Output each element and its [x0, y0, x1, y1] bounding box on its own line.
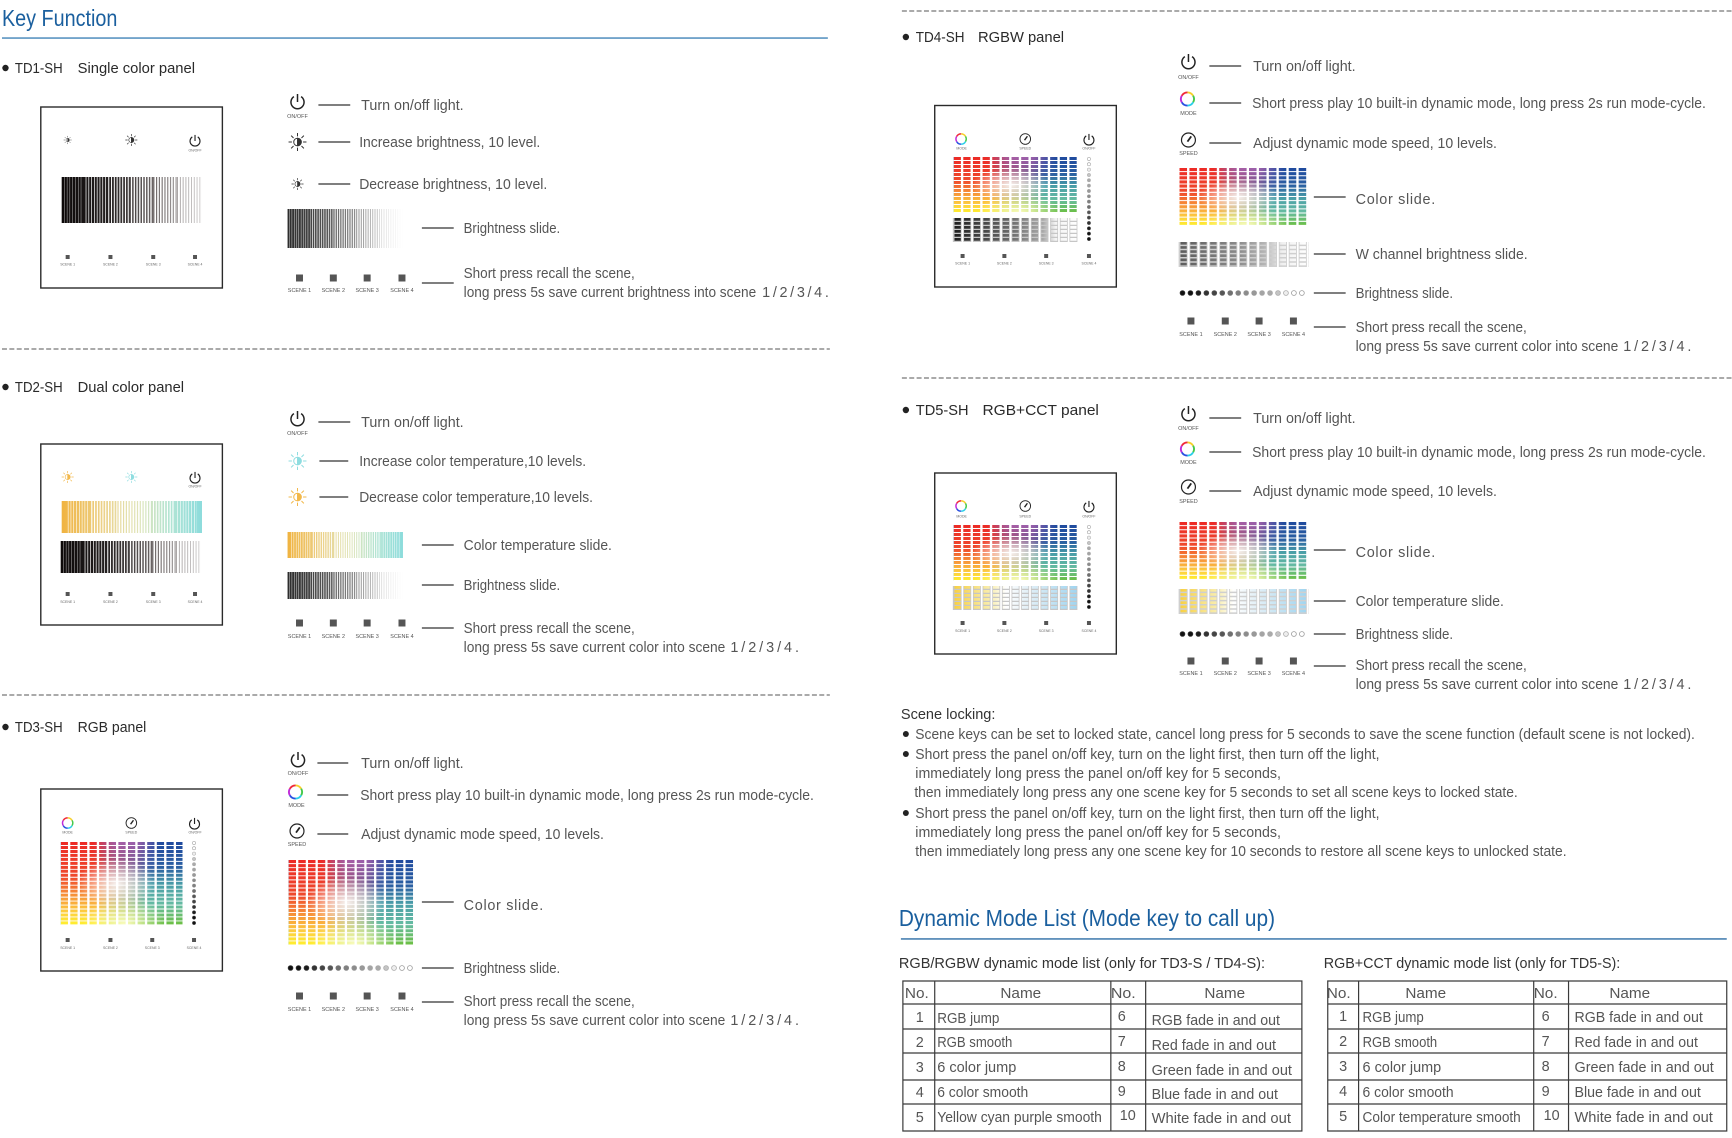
key: decrease color temperature: Decrease color temperature,10 levels. — [359, 490, 593, 506]
table cells: Red fade in and out — [1152, 1038, 1276, 1054]
panel illustration TD3: SCENE 2 — [103, 946, 118, 950]
section title TD4-SH: RGBW panel — [978, 29, 1064, 46]
panel illustration TD4: SPEED — [1019, 146, 1032, 151]
key: scene buttons: SCENE 1 — [1179, 332, 1203, 338]
table cells — [905, 986, 1292, 1127]
table cells: 6 color jump — [937, 1060, 1016, 1076]
key: on/off: ON/OFF — [287, 431, 308, 437]
table grid — [1328, 981, 1727, 1131]
section: TD4-SH RGBW panel — [903, 29, 1706, 355]
key: brightness slide: Brightness slide. — [1356, 286, 1453, 302]
table cells: Yellow cyan purple smooth — [937, 1110, 1102, 1126]
table cells: 10 — [1120, 1108, 1136, 1124]
table cells: 6 color jump — [1363, 1060, 1441, 1076]
key: decrease brightness: Decrease brightness, 10 level. — [359, 177, 547, 193]
key: color temperature slide — [288, 532, 612, 558]
key: speed — [288, 824, 604, 848]
table cells: No. — [1111, 986, 1136, 1002]
panel illustration TD3: SCENE 1 — [60, 946, 75, 950]
panel illustration TD5: SCENE 4 — [1082, 629, 1096, 633]
panel illustration TD4: SCENE 4 — [1082, 261, 1096, 266]
panel illustration TD1: SCENE 2 — [103, 262, 118, 267]
key: scene buttons: long press 5s save current color into scene — [1356, 677, 1618, 693]
table cells: 6 color smooth — [1363, 1085, 1454, 1101]
section: TD2-SH dual color panel — [2, 379, 799, 656]
table cells: Name — [1204, 986, 1245, 1002]
key: on/off: ON/OFF — [288, 771, 309, 777]
key: scene buttons: Short press recall the scene, — [1356, 320, 1527, 336]
key: scene buttons: SCENE 1 — [288, 634, 311, 640]
key: scene buttons: long press 5s save current color into scene — [464, 1013, 725, 1029]
key: brightness slide — [1180, 286, 1453, 302]
panel illustration TD4: SCENE 1 — [955, 261, 970, 266]
panel illustration TD3: SPEED — [125, 830, 138, 835]
key: scene buttons: SCENE 2 — [1214, 332, 1237, 338]
key: mode: Short press play 10 built-in dynamic mode, long press 2s run mode-cycle. — [1252, 445, 1706, 461]
table: RGB/RGBW dynamic mode list — [899, 956, 1302, 1131]
section title TD3-SH: TD3-SH — [15, 719, 63, 736]
section: TD1-SH single color panel — [2, 60, 829, 301]
table cells: Green fade in and out — [1152, 1063, 1292, 1079]
panel illustration TD5: SCENE 3 — [1039, 629, 1054, 633]
panel illustration TD1 — [41, 107, 222, 288]
left column — [2, 5, 830, 1029]
table cells: RGB fade in and out — [1152, 1013, 1280, 1029]
panel illustration TD4 — [935, 106, 1116, 287]
key: speed: Adjust dynamic mode speed, 10 levels. — [1253, 136, 1497, 152]
table cells: 9 — [1118, 1084, 1126, 1100]
table cells: RGB jump — [1363, 1010, 1424, 1026]
section title TD2-SH: TD2-SH — [15, 379, 63, 396]
panel illustration TD5: ON/OFF — [1082, 514, 1096, 519]
section title TD4-SH: TD4-SH — [916, 29, 965, 46]
panel illustration TD1: SCENE 4 — [188, 262, 203, 267]
table cells: 3 — [1339, 1059, 1347, 1075]
panel illustration TD4: SCENE 2 — [997, 261, 1012, 266]
table cells: 6 — [1542, 1009, 1550, 1025]
text block: scene locking: Short press the panel on/off key, turn on the light first, then turn off the light, — [915, 806, 1379, 822]
key: scene buttons: SCENE 3 — [355, 1007, 379, 1013]
table cells: 9 — [1542, 1084, 1550, 1100]
key: scene buttons: long press 5s save current color into scene — [1356, 339, 1618, 355]
key: on/off — [287, 411, 464, 437]
key: color slide — [1179, 168, 1435, 246]
key: speed: SPEED — [288, 842, 306, 848]
panel illustration TD5: SCENE 2 — [997, 629, 1012, 633]
key: scene buttons: SCENE 4 — [390, 1007, 414, 1013]
table cells: 2 — [1339, 1034, 1347, 1050]
key: decrease color temperature — [289, 488, 593, 506]
key: scene buttons: Short press recall the scene, — [1356, 658, 1527, 674]
table cells: Name — [1609, 986, 1650, 1002]
table cells: 8 — [1542, 1059, 1550, 1075]
heading: Key Function: Key Function — [2, 5, 117, 31]
panel illustration TD1: SCENE 1 — [60, 262, 75, 267]
key: color temperature slide — [1179, 589, 1504, 614]
table cells — [1327, 986, 1714, 1126]
key: brightness slide: Brightness slide. — [1356, 627, 1453, 643]
key: scene buttons: long press 5s save current color into scene — [464, 640, 725, 656]
key: color slide — [289, 860, 543, 974]
key: color slide — [1179, 522, 1435, 600]
key: brightness slide — [288, 572, 560, 599]
key: on/off — [1178, 406, 1356, 432]
key: on/off: Turn on/off light. — [361, 415, 464, 431]
key: increase color temperature: Increase color temperature,10 levels. — [359, 454, 586, 470]
panel illustration TD1: SCENE 3 — [146, 262, 161, 267]
key: increase brightness — [289, 133, 540, 151]
panel illustration TD5: SCENE 1 — [955, 629, 970, 633]
key: scene buttons — [288, 266, 829, 301]
table cells: Red fade in and out — [1575, 1035, 1698, 1051]
key: mode: Short press play 10 built-in dynamic mode, long press 2s run mode-cycle. — [1252, 96, 1706, 112]
key: color slide: Color slide. — [1356, 192, 1435, 208]
section: TD3-SH RGB panel — [2, 719, 814, 1029]
key: scene buttons — [1179, 658, 1691, 693]
table caption: RGB+CCT dynamic mode list (only for TD5-S): — [1324, 956, 1620, 972]
key: brightness slide — [288, 209, 560, 248]
key: scene buttons: SCENE 1 — [288, 1007, 311, 1013]
table cells: 7 — [1542, 1034, 1550, 1050]
key: brightness slide — [288, 961, 560, 977]
text block: scene locking: immediately long press the panel on/off key for 5 seconds, — [915, 825, 1281, 841]
section: TD5-SH RGB+CCT panel — [903, 402, 1706, 693]
section title TD5-SH: TD5-SH — [916, 402, 969, 419]
key: mode: MODE — [288, 803, 305, 809]
key: on/off — [287, 94, 464, 120]
key: scene buttons: SCENE 2 — [322, 288, 345, 294]
key: scene buttons — [288, 992, 799, 1029]
text block: scene locking: Scene locking: — [901, 707, 995, 723]
key: mode — [1180, 92, 1706, 117]
key: color slide: Color slide. — [464, 898, 543, 914]
text block: scene locking: Short press the panel on/off key, turn on the light first, then turn off the light, — [915, 747, 1379, 763]
panel illustration TD5 — [935, 473, 1116, 654]
section title TD1-SH: Single color panel — [78, 60, 195, 77]
section title TD2-SH — [2, 379, 184, 396]
key: color temperature slide: Color temperature slide. — [464, 538, 612, 554]
key: brightness slide: Brightness slide. — [464, 961, 560, 977]
section title TD3-SH: RGB panel — [78, 719, 146, 736]
section title TD3-SH — [2, 719, 146, 736]
panel illustration TD2: SCENE 1 — [60, 600, 75, 604]
key: speed: Adjust dynamic mode speed, 10 levels. — [1253, 484, 1497, 500]
table cells: 5 — [916, 1110, 924, 1126]
section title TD1-SH: TD1-SH — [15, 60, 63, 77]
panel illustration TD2: SCENE 4 — [188, 600, 203, 604]
key: scene buttons: SCENE 4 — [390, 634, 414, 640]
key: mode — [1180, 442, 1706, 466]
key: scene buttons: 1/2/3/4. — [730, 1013, 799, 1029]
table cells: RGB smooth — [1363, 1035, 1437, 1051]
key: on/off: Turn on/off light. — [1253, 59, 1356, 75]
key: speed: SPEED — [1179, 151, 1198, 157]
panel illustration TD3: ON/OFF — [188, 830, 202, 835]
table cells: Green fade in and out — [1575, 1060, 1714, 1076]
key: on/off: Turn on/off light. — [361, 756, 464, 772]
table caption: RGB/RGBW dynamic mode list (only for TD3-S / TD4-S): — [899, 956, 1265, 972]
table cells: No. — [1327, 986, 1351, 1002]
text block: scene locking: then immediately long press any one scene key for 10 seconds to restore all scene keys to unlocked state. — [915, 844, 1567, 860]
panel illustration TD3 — [41, 789, 222, 971]
panel illustration TD5: MODE — [956, 514, 967, 519]
panel illustration TD2: SCENE 2 — [103, 600, 118, 604]
table cells: Name — [1405, 986, 1446, 1002]
key: scene buttons: SCENE 2 — [322, 634, 345, 640]
panel illustration TD4: ON/OFF — [1082, 146, 1096, 151]
key: scene buttons — [1179, 318, 1691, 355]
table cells: Blue fade in and out — [1152, 1087, 1278, 1103]
key: speed — [1179, 480, 1497, 505]
table cells: RGB smooth — [937, 1035, 1012, 1051]
table cells: RGB jump — [937, 1011, 999, 1027]
key: color temperature slide: Color temperature slide. — [1356, 594, 1504, 610]
key: scene buttons: Short press recall the scene, — [464, 994, 635, 1010]
key: scene buttons: SCENE 2 — [322, 1007, 345, 1013]
panel illustration TD4: MODE — [956, 146, 967, 151]
table cells: Name — [1000, 986, 1041, 1002]
table cells: White fade in and out — [1152, 1111, 1291, 1127]
table cells: 4 — [1339, 1084, 1347, 1100]
table: RGB+CCT dynamic mode list — [1324, 956, 1727, 1131]
table cells: 6 — [1118, 1009, 1126, 1025]
panel illustration TD2: SCENE 3 — [146, 600, 161, 604]
table cells: RGB fade in and out — [1575, 1010, 1703, 1026]
table cells: No. — [905, 986, 929, 1002]
key: scene buttons: SCENE 3 — [355, 634, 379, 640]
right column — [899, 11, 1732, 1131]
key: scene buttons: 1/2/3/4. — [1623, 339, 1691, 355]
key: scene buttons: Short press recall the scene, — [464, 621, 635, 637]
table cells: 1 — [916, 1010, 924, 1026]
table cells: 1 — [1339, 1009, 1347, 1025]
key: speed: Adjust dynamic mode speed, 10 levels. — [361, 827, 604, 843]
heading: Dynamic Mode List: Dynamic Mode List (Mode key to call up) — [899, 905, 1275, 931]
key: mode: MODE — [1180, 460, 1197, 466]
key: W channel brightness slide — [1179, 242, 1528, 267]
table cells: 7 — [1118, 1034, 1126, 1050]
table grid — [903, 981, 1302, 1131]
key: mode: MODE — [1180, 111, 1197, 117]
text block: scene locking: then immediately long press any one scene key for 5 seconds to set all scene keys to locked state. — [914, 785, 1518, 801]
key: color slide: Color slide. — [1356, 545, 1435, 561]
table cells: No. — [1534, 986, 1558, 1002]
panel illustration TD2 — [41, 444, 222, 625]
key: on/off: Turn on/off light. — [1253, 411, 1356, 427]
key: scene buttons: 1/2/3/4. — [762, 285, 829, 301]
key: on/off: Turn on/off light. — [361, 98, 464, 114]
key: scene buttons — [288, 620, 799, 656]
key: scene buttons: SCENE 2 — [1214, 671, 1237, 677]
panel illustration TD2: ON/OFF — [188, 484, 202, 489]
section title TD4-SH — [903, 29, 1064, 46]
key: W channel brightness slide: W channel brightness slide. — [1356, 247, 1528, 263]
key: scene buttons: 1/2/3/4. — [1623, 677, 1691, 693]
panel illustration TD5: SPEED — [1019, 514, 1032, 519]
key: brightness slide: Brightness slide. — [464, 221, 560, 237]
key: mode — [288, 785, 814, 809]
section title TD5-SH: RGB+CCT panel — [982, 402, 1099, 419]
key: scene buttons: 1/2/3/4. — [730, 640, 799, 656]
key: increase brightness: Increase brightness, 10 level. — [359, 135, 540, 151]
key: brightness slide: Brightness slide. — [464, 578, 560, 594]
section title TD2-SH: Dual color panel — [78, 379, 184, 396]
table cells: 4 — [916, 1085, 924, 1101]
table cells: 6 color smooth — [937, 1085, 1028, 1101]
table cells: 3 — [916, 1060, 924, 1076]
table cells: 10 — [1544, 1108, 1560, 1124]
key: on/off — [288, 752, 464, 777]
key: scene buttons: SCENE 3 — [1247, 332, 1271, 338]
key: mode: Short press play 10 built-in dynamic mode, long press 2s run mode-cycle. — [360, 788, 814, 804]
key: on/off: ON/OFF — [287, 114, 308, 120]
key: on/off — [1178, 54, 1356, 81]
key: scene buttons: SCENE 3 — [1247, 671, 1271, 677]
panel illustration TD3: MODE — [62, 830, 74, 835]
text block: scene locking: immediately long press the panel on/off key for 5 seconds, — [915, 766, 1281, 782]
table cells: 5 — [1339, 1109, 1347, 1125]
key: scene buttons: SCENE 4 — [1282, 332, 1305, 338]
section title TD1-SH — [2, 60, 195, 77]
panel illustration TD3: SCENE 4 — [187, 946, 202, 950]
key: brightness slide — [1180, 627, 1453, 643]
key: scene buttons: SCENE 1 — [1179, 671, 1203, 677]
key: scene buttons: long press 5s save current brightness into scene — [464, 285, 756, 301]
panel illustration TD4: SCENE 3 — [1039, 261, 1054, 266]
table cells: 8 — [1118, 1059, 1126, 1075]
key: speed: SPEED — [1179, 499, 1198, 505]
key: scene buttons: SCENE 1 — [288, 288, 311, 294]
key: scene buttons: Short press recall the scene, — [464, 266, 635, 282]
table cells: Blue fade in and out — [1575, 1085, 1701, 1101]
panel illustration TD1: ON/OFF — [188, 148, 202, 153]
section title TD5-SH — [903, 402, 1099, 419]
key: increase color temperature — [289, 452, 586, 470]
key: on/off: ON/OFF — [1178, 75, 1199, 81]
key: speed — [1179, 133, 1497, 157]
key: scene buttons: SCENE 4 — [1282, 671, 1305, 677]
key: scene buttons: SCENE 3 — [355, 288, 379, 294]
panel illustration TD3: SCENE 3 — [145, 946, 160, 950]
table cells: Color temperature smooth — [1363, 1110, 1521, 1126]
text block: scene locking: Scene keys can be set to locked state, cancel long press for 5 seconds to save the scene function (default scene is not locked). — [915, 727, 1695, 743]
text block: scene locking — [901, 707, 1695, 860]
table cells: 2 — [916, 1035, 924, 1051]
key: on/off: ON/OFF — [1178, 426, 1199, 432]
key: scene buttons: SCENE 4 — [390, 288, 414, 294]
table cells: White fade in and out — [1575, 1110, 1713, 1126]
